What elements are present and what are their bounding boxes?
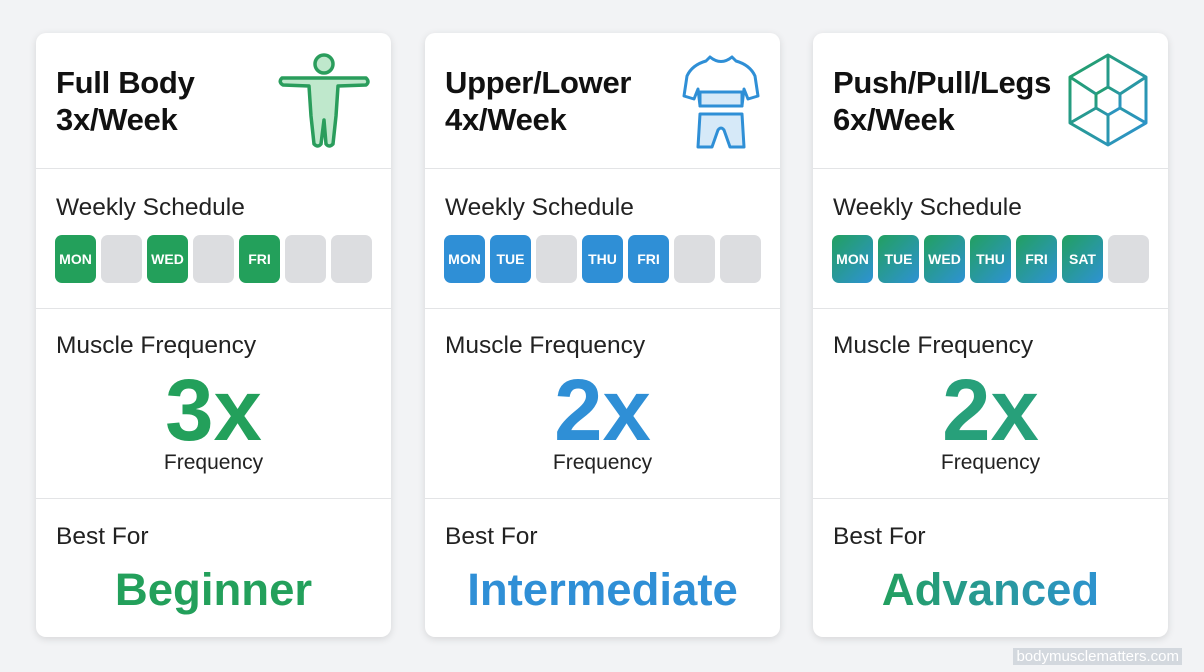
schedule chips: MON: [448, 251, 481, 267]
icon: person: [278, 53, 370, 148]
level: beginner: Beginner: [115, 564, 312, 615]
schedule chips: [444, 235, 761, 283]
schedule chips: [55, 235, 372, 283]
caption: Frequency: [553, 451, 652, 474]
panel: full body: [36, 33, 391, 637]
watermark: bodymusclematters.com: [1016, 648, 1179, 665]
schedule chips: TUE: [496, 251, 524, 267]
title: ppl: [833, 65, 1051, 137]
title: upper/lower: 4x/Week: [445, 102, 566, 137]
caption: Frequency: [941, 451, 1040, 474]
level: intermediate: Intermediate: [467, 564, 738, 615]
heading: best for: Best For: [445, 523, 538, 550]
schedule chips: TUE: [884, 251, 912, 267]
level: advanced: Advanced: [882, 564, 1099, 615]
stat: 2x: 2x: [554, 362, 651, 459]
stat: 3x: 3x: [165, 362, 262, 459]
heading: best for: Best For: [833, 523, 926, 550]
schedule chips: FRI: [248, 251, 271, 267]
title: full body: Full Body: [56, 65, 195, 100]
title: ppl: 6x/Week: [833, 102, 954, 137]
schedule chips: MON: [836, 251, 869, 267]
heading: weekly schedule: Weekly Schedule: [56, 194, 245, 221]
title: upper/lower: Upper/Lower: [445, 65, 631, 100]
title: upper/lower: [445, 65, 631, 137]
icon: hex puzzle: [1068, 54, 1148, 146]
schedule chips: SAT: [1069, 251, 1096, 267]
icon: torso: [682, 55, 760, 148]
stat: 2x: 2x: [942, 362, 1039, 459]
schedule chips: [832, 235, 1149, 283]
title: full body: [56, 65, 195, 137]
heading: best for: Best For: [56, 523, 149, 550]
schedule chips: MON: [59, 251, 92, 267]
title: full body: 3x/Week: [56, 102, 177, 137]
schedule chips: THU: [588, 251, 617, 267]
schedule chips: FRI: [637, 251, 660, 267]
heading: weekly schedule: Weekly Schedule: [833, 194, 1022, 221]
schedule chips: WED: [151, 251, 184, 267]
schedule chips: FRI: [1025, 251, 1048, 267]
heading: muscle frequency: Muscle Frequency: [56, 332, 256, 359]
panel: upper/lower: [425, 33, 780, 637]
caption: Frequency: [164, 451, 263, 474]
heading: muscle frequency: Muscle Frequency: [833, 332, 1033, 359]
schedule chips: WED: [928, 251, 961, 267]
heading: muscle frequency: Muscle Frequency: [445, 332, 645, 359]
title: ppl: Push/Pull/Legs: [833, 65, 1051, 100]
heading: weekly schedule: Weekly Schedule: [445, 194, 634, 221]
panel: push/pull/legs: [813, 33, 1168, 637]
schedule chips: THU: [976, 251, 1005, 267]
